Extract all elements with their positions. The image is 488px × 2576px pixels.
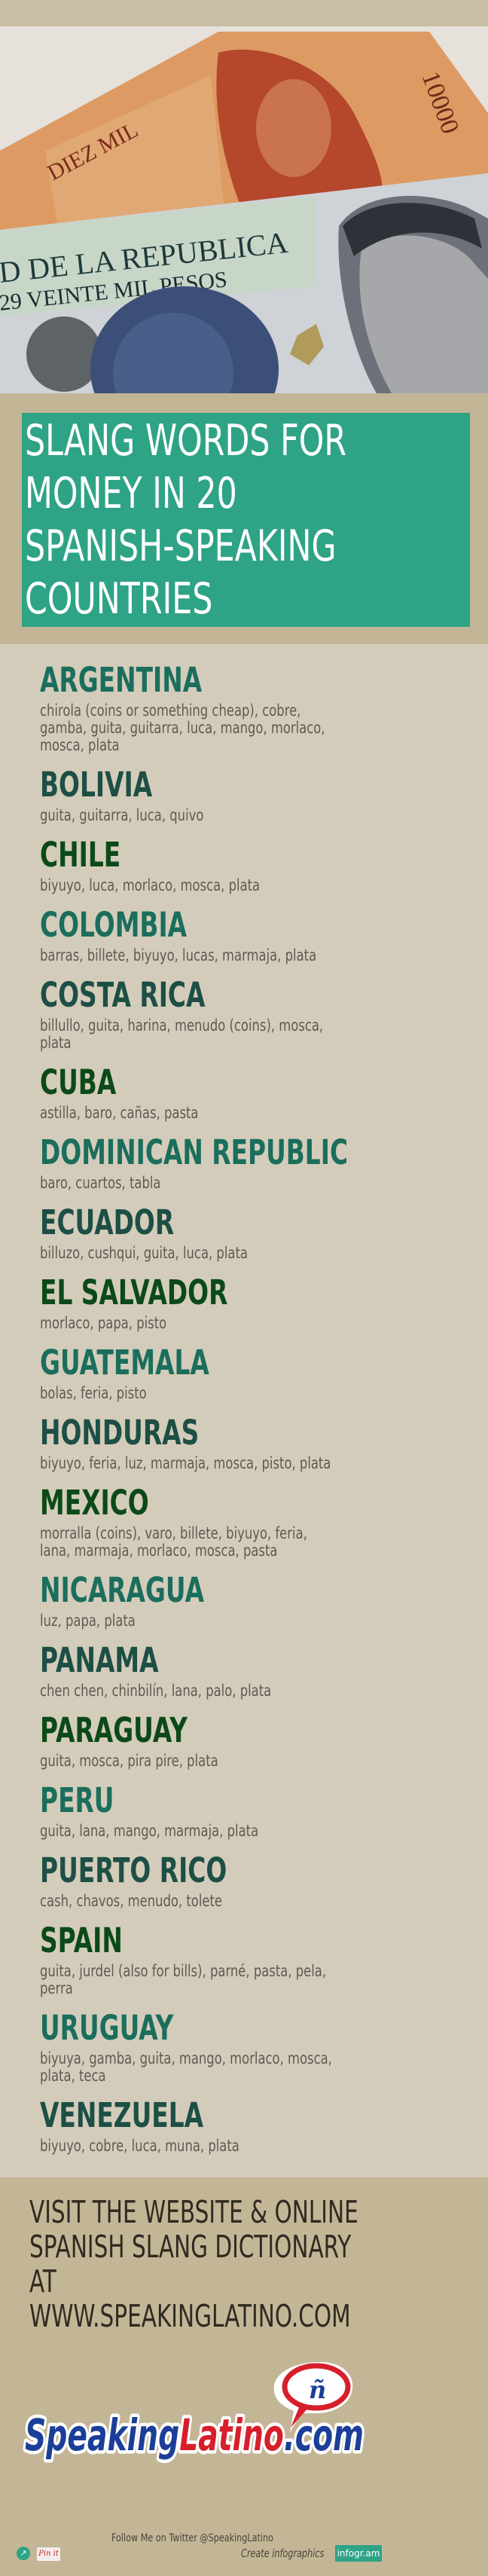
entry: Chile: biyuyo, luca, morlaco, mosca, plata	[40, 876, 260, 894]
footer: infogr.am badge	[335, 2545, 382, 2562]
entry: Spain: perra	[40, 1979, 73, 1997]
entry: Cuba: CUBA	[40, 1062, 116, 1102]
entry: Costa Rica: COSTA RICA	[40, 975, 205, 1015]
footer: create infographics: Create infographics	[241, 2547, 324, 2560]
entry: Argentina: gamba, guita, guitarra, luca, mango, morlaco,	[40, 719, 325, 737]
entry: Nicaragua: NICARAGUA	[40, 1570, 204, 1610]
entry: Paraguay: PARAGUAY	[40, 1710, 188, 1750]
entry: Bolivia: BOLIVIA	[40, 765, 152, 805]
entry: Puerto Rico: PUERTO RICO	[40, 1850, 227, 1890]
icon: speech bubble with ñ	[274, 2362, 352, 2432]
entry: Uruguay: biyuya, gamba, guita, mango, morlaco, mosca,	[40, 2049, 332, 2067]
blue banknote: D DE LA REPUBLICA	[0, 225, 290, 289]
blue banknote: 29 VEINTE MIL PESOS	[0, 267, 228, 316]
entry: El Salvador: EL SALVADOR	[40, 1273, 227, 1312]
entry: Chile	[40, 835, 260, 894]
entry: Cuba: astilla, baro, cañas, pasta	[40, 1104, 198, 1122]
call to action text: SPANISH SLANG DICTIONARY	[29, 2229, 351, 2265]
title text: COUNTRIES	[25, 574, 212, 624]
entry: Uruguay: URUGUAY	[40, 2008, 173, 2048]
entry: Chile: CHILE	[40, 835, 120, 875]
entry: Puerto Rico	[40, 1850, 227, 1910]
entry: Argentina: chirola (coins or something cheap), cobre,	[40, 701, 300, 720]
header photo: banknotes	[0, 26, 488, 393]
entry: Ecuador: billuzo, cushqui, guita, luca, plata	[40, 1244, 248, 1262]
entry: Panama	[40, 1640, 271, 1700]
entry: Argentina: mosca, plata	[40, 736, 120, 754]
entry: Mexico: morralla (coins), varo, billete, biyuyo, feria,	[40, 1524, 307, 1542]
call to action text: AT	[29, 2263, 56, 2299]
entry: Venezuela: biyuyo, cobre, luca, muna, plata	[40, 2137, 239, 2155]
entry: Dominican Republic: baro, cuartos, tabla	[40, 1174, 160, 1192]
entry: Uruguay	[40, 2008, 332, 2085]
title text	[25, 416, 346, 624]
footer: twitter line: Follow Me on Twitter @SpeakingLatino	[111, 2532, 273, 2544]
entry: Dominican Republic	[40, 1132, 348, 1192]
entry: Guatemala: bolas, feria, pisto	[40, 1384, 147, 1402]
icon: pin it button	[37, 2547, 60, 2561]
entry: Guatemala: GUATEMALA	[40, 1343, 209, 1383]
entry: Paraguay	[40, 1710, 218, 1770]
title text: SPANISH-SPEAKING	[25, 521, 337, 571]
entry: Guatemala	[40, 1343, 209, 1402]
entry: Colombia: COLOMBIA	[40, 905, 187, 945]
entry: Venezuela: VENEZUELA	[40, 2095, 203, 2135]
country list	[40, 660, 348, 2155]
icon: speech bubble with ñ: ñ	[309, 2376, 326, 2404]
entry: Uruguay: plata, teca	[40, 2067, 106, 2085]
call to action text	[29, 2194, 358, 2334]
entry: Mexico	[40, 1483, 307, 1560]
entry: Puerto Rico: cash, chavos, menudo, tolete	[40, 1892, 222, 1910]
entry: Costa Rica	[40, 975, 323, 1052]
entry: Costa Rica: plata	[40, 1034, 72, 1052]
entry: Honduras: biyuyo, feria, luz, marmaja, mosca, pisto, plata	[40, 1454, 331, 1472]
call to action text: VISIT THE WEBSITE & ONLINE	[29, 2194, 358, 2230]
entry: Honduras	[40, 1413, 331, 1472]
orange banknote: 10000	[416, 68, 464, 138]
entry: Ecuador: ECUADOR	[40, 1202, 174, 1242]
entry: El Salvador	[40, 1273, 227, 1332]
entry: Spain	[40, 1921, 326, 1997]
entry: Bolivia	[40, 765, 203, 824]
entry: Nicaragua: luz, papa, plata	[40, 1612, 136, 1630]
entry: El Salvador: morlaco, papa, pisto	[40, 1314, 166, 1332]
entry: Venezuela	[40, 2095, 239, 2155]
blue banknote	[0, 173, 488, 452]
orange banknote: DIEZ MIL	[44, 118, 142, 185]
title text: MONEY IN 20	[25, 469, 237, 518]
icon: share button	[17, 2547, 30, 2560]
title box	[22, 413, 470, 627]
entry: Argentina	[40, 660, 325, 754]
entry: Bolivia: guita, guitarra, luca, quivo	[40, 806, 203, 824]
icon: share button: ↗	[20, 2548, 27, 2558]
entry: Colombia: barras, billete, biyuyo, lucas, marmaja, plata	[40, 946, 316, 964]
entry: Paraguay: guita, mosca, pira pire, plata	[40, 1752, 218, 1770]
entry: Colombia	[40, 905, 316, 964]
entry: Mexico: MEXICO	[40, 1483, 149, 1523]
entry: Costa Rica: billullo, guita, harina, menudo (coins), mosca,	[40, 1016, 323, 1034]
entry: Nicaragua	[40, 1570, 204, 1630]
entry: Peru	[40, 1780, 258, 1840]
entry: Panama: PANAMA	[40, 1640, 159, 1680]
background: top sand strip	[0, 0, 488, 30]
list panel background	[0, 644, 488, 2177]
entry: Mexico: lana, marmaja, morlaco, mosca, pasta	[40, 1542, 277, 1560]
entry: Peru: PERU	[40, 1780, 114, 1820]
title panel background	[0, 393, 488, 644]
icon: pin it button: Pin it	[38, 2550, 59, 2558]
entry: Spain: SPAIN	[40, 1921, 123, 1960]
orange banknote	[0, 32, 488, 249]
entry: Cuba	[40, 1062, 198, 1122]
entry: Panama: chen chen, chinbilín, lana, palo, plata	[40, 1682, 271, 1700]
call to action text: WWW.SPEAKINGLATINO.COM	[29, 2298, 351, 2334]
entry: Argentina: ARGENTINA	[40, 660, 202, 700]
entry: Spain: guita, jurdel (also for bills), parné, pasta, pela,	[40, 1962, 326, 1980]
entry: Ecuador	[40, 1202, 248, 1262]
entry: Dominican Republic: DOMINICAN REPUBLIC	[40, 1132, 348, 1172]
title text: SLANG WORDS FOR	[25, 416, 346, 466]
footer: infogr.am badge: infogr.am	[337, 2548, 380, 2559]
logo: SpeakingLatino.com	[23, 2362, 364, 2463]
entry: Honduras: HONDURAS	[40, 1413, 199, 1453]
entry: Peru: guita, lana, mango, marmaja, plata	[40, 1822, 258, 1840]
